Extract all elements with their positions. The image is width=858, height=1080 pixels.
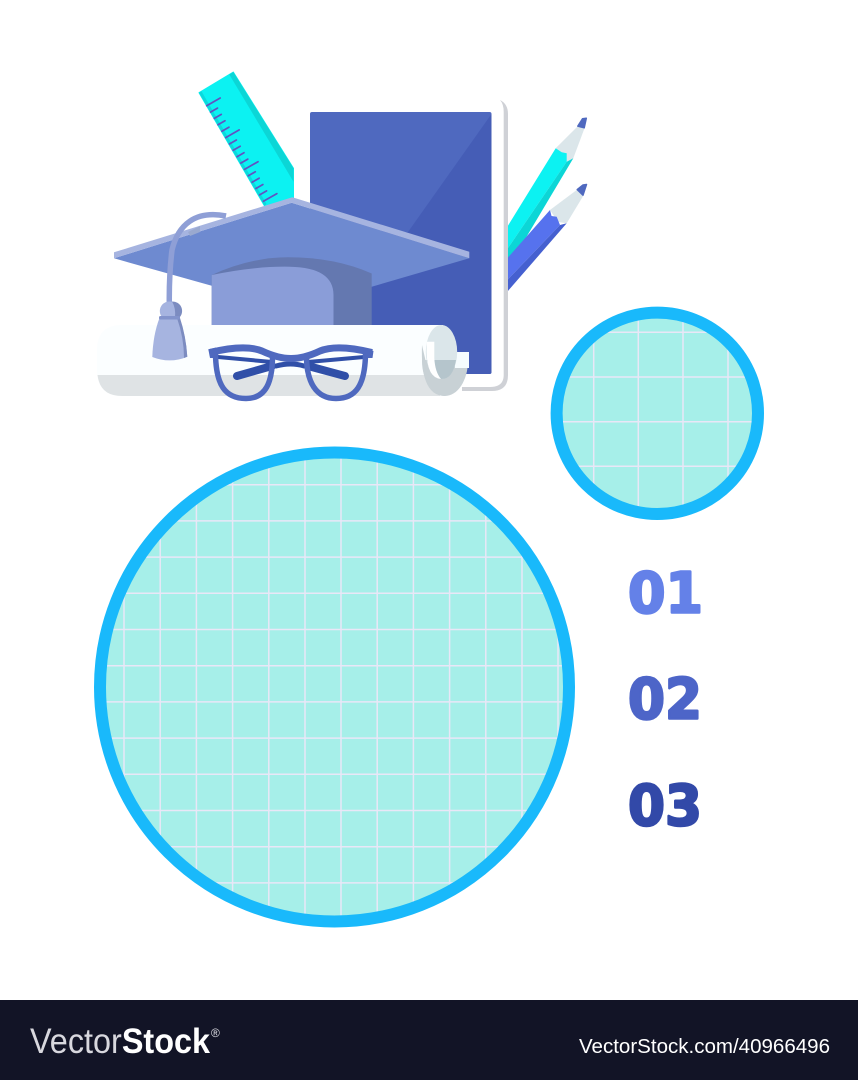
label: number 01: 01 — [628, 562, 703, 626]
panel: diploma scroll — [97, 325, 469, 396]
footer registered mark: ® — [211, 1026, 220, 1040]
panel: white tablet frame — [300, 100, 508, 391]
panel: small grid circle — [550, 300, 770, 530]
icon: pencil cyan — [507, 118, 586, 269]
panel: large grid circle — [90, 440, 580, 935]
icon: graduation tassel — [152, 215, 226, 360]
icon: pencil blue — [507, 184, 586, 292]
icon: glasses — [208, 348, 374, 398]
footer image id: VectorStock.com/40966496 — [579, 1035, 830, 1058]
footer bar — [0, 1000, 858, 1080]
panel: blue book — [310, 112, 492, 374]
icon: graduation cap — [114, 197, 469, 326]
illustration: education objects — [97, 72, 586, 398]
cap base — [212, 257, 372, 326]
cap board — [114, 197, 469, 287]
icon: ruler — [199, 72, 294, 206]
footer logo: VectorStock — [30, 1022, 210, 1061]
label: number 02: 02 — [628, 668, 702, 732]
label: number 03: 03 — [628, 774, 702, 839]
